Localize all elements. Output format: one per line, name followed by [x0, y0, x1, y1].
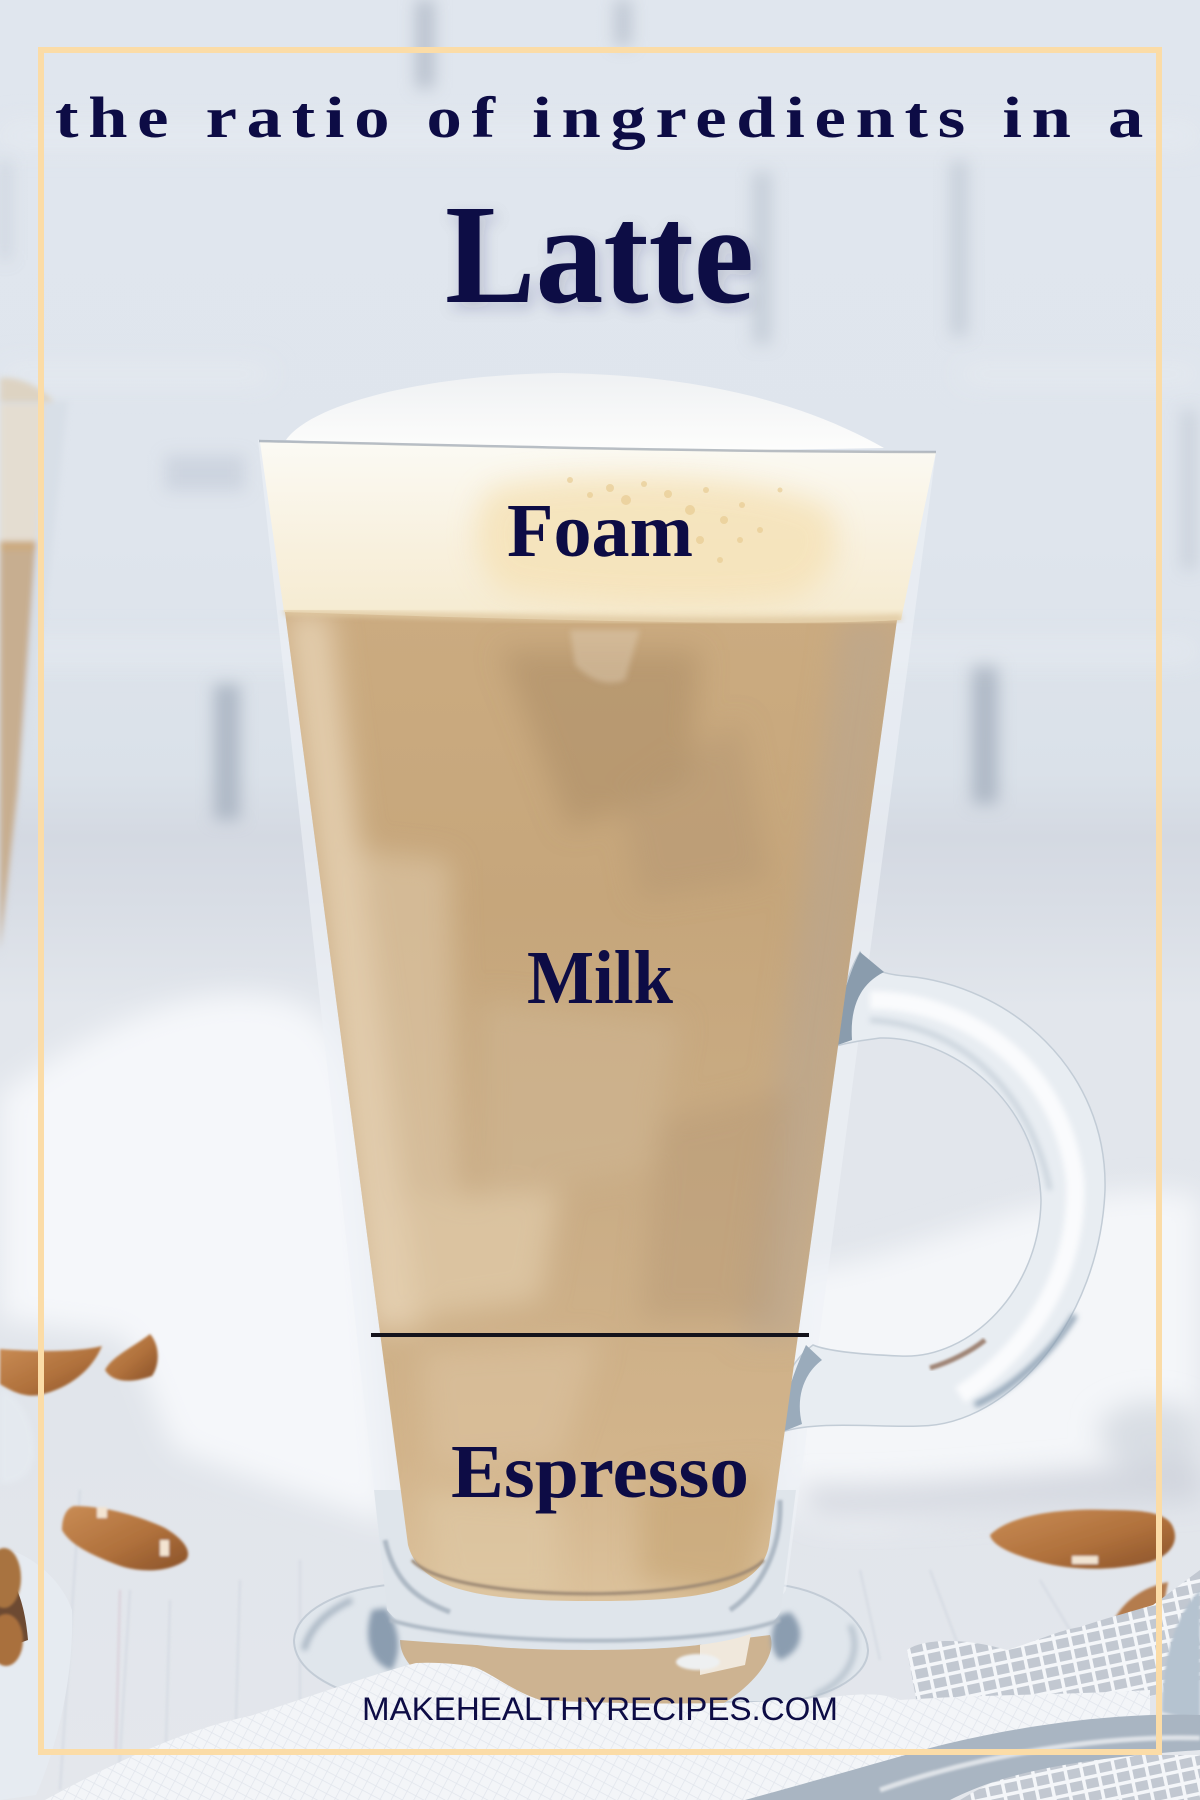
small white cup left	[0, 1388, 35, 1484]
spoon bowl	[1162, 1590, 1200, 1722]
foam bubbles	[476, 477, 836, 605]
net lower right	[960, 1755, 1200, 1800]
cloth fold shadow	[800, 1401, 1200, 1517]
glass handle	[780, 952, 1105, 1432]
glass base reflections	[385, 1500, 780, 1641]
white cloth	[0, 995, 1200, 1526]
almonds	[0, 1334, 1175, 1630]
milk swirls	[285, 612, 900, 1600]
divider between milk and espresso	[371, 1333, 809, 1337]
almond left 2	[105, 1334, 158, 1381]
foam body	[260, 442, 936, 623]
heading: Latte: Latte	[445, 175, 754, 333]
spoon handle	[745, 1715, 1200, 1800]
foam bottom edge	[284, 612, 901, 621]
bowl almonds	[0, 1548, 23, 1666]
bowl of almonds	[0, 1388, 72, 1800]
net cloth at the bottom	[45, 1570, 1200, 1800]
glass rim	[259, 441, 936, 452]
almond left 1	[0, 1346, 102, 1396]
glass base thick bottom	[374, 1490, 796, 1650]
glass foot	[294, 1585, 868, 1715]
coffee bottom rim	[412, 1560, 764, 1594]
bowl	[0, 1548, 72, 1800]
spoon reflection	[880, 1738, 1200, 1790]
spoon	[745, 1590, 1200, 1800]
coffee body	[285, 612, 897, 1601]
almond left 3	[62, 1506, 188, 1570]
foam layer	[260, 442, 936, 623]
wall highlight bands	[0, 125, 1200, 662]
label: Foam: Foam	[507, 489, 693, 573]
wall grout marks	[0, 0, 1196, 820]
bowl inner	[0, 1570, 28, 1650]
heading: the ratio of ingredients in a: the ratio of ingredients in a	[55, 85, 1153, 150]
almond right	[990, 1510, 1175, 1569]
table wood streaks	[60, 1490, 1070, 1790]
website credit: MAKEHEALTHYRECIPES.COM	[362, 1691, 838, 1727]
coffee and milk layer	[285, 612, 900, 1601]
label: Milk: Milk	[527, 936, 674, 1020]
second latte glass on the left	[0, 378, 68, 960]
foam dome	[286, 373, 884, 450]
glass body	[258, 440, 936, 1628]
almond behind net	[1115, 1582, 1168, 1630]
net open weave right	[907, 1570, 1200, 1720]
net cloth main	[45, 1663, 1150, 1800]
latte glass	[258, 373, 1105, 1715]
label: Espresso: Espresso	[451, 1430, 749, 1514]
